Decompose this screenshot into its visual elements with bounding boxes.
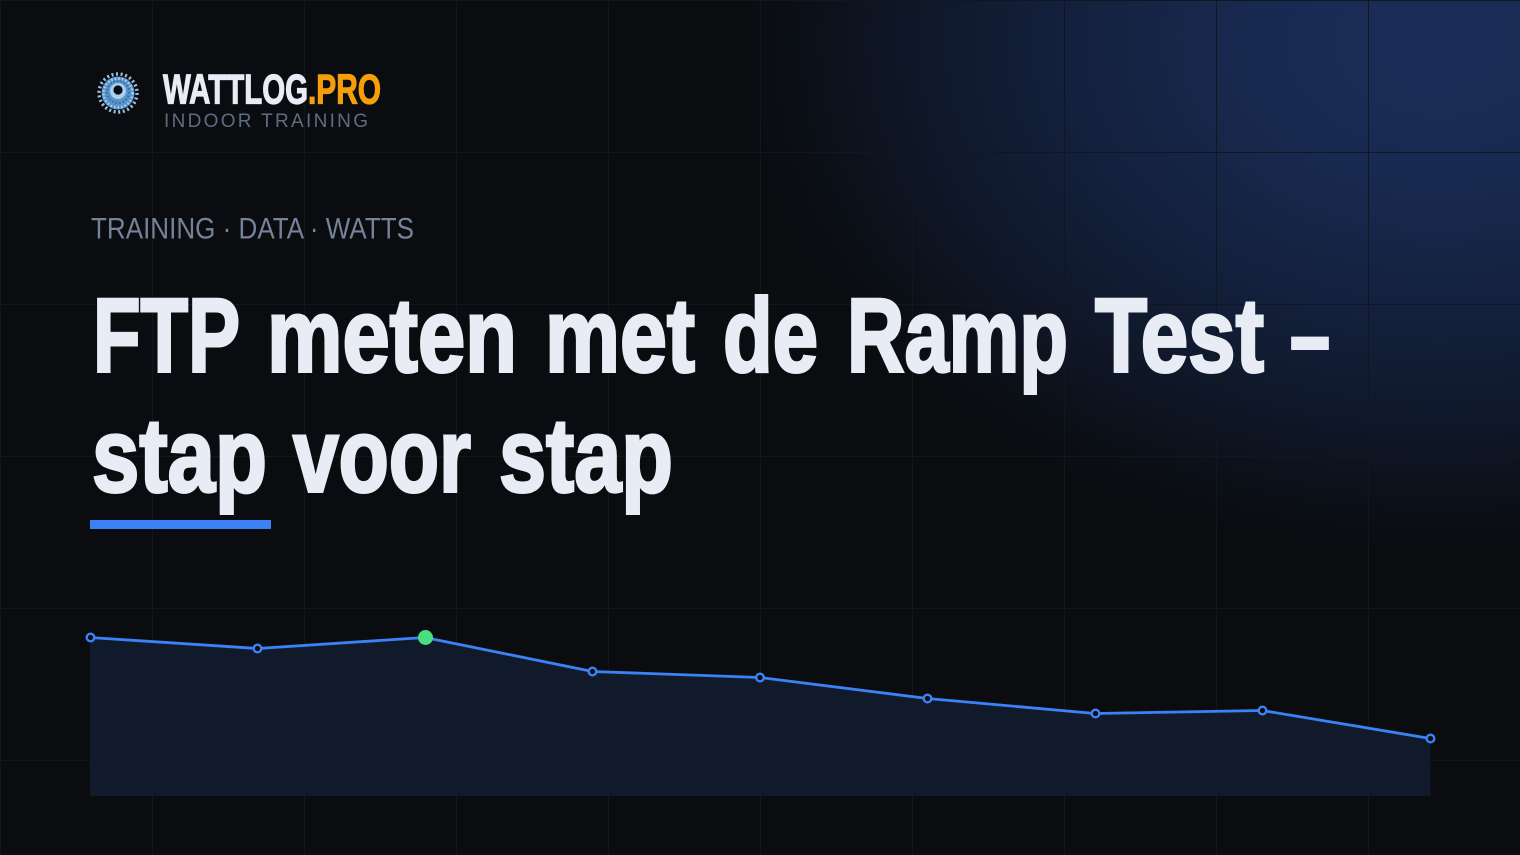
title: de bbox=[723, 278, 818, 394]
title: Test bbox=[1095, 278, 1264, 394]
title: FTP bbox=[93, 278, 240, 394]
title: voor bbox=[293, 398, 471, 514]
line chart bbox=[87, 630, 1434, 796]
chart peak point bbox=[418, 630, 433, 645]
title: Ramp bbox=[847, 278, 1068, 394]
brand name: .PRO bbox=[308, 66, 381, 112]
chart area fill bbox=[90, 637, 1430, 796]
title: stap bbox=[499, 398, 673, 514]
brand tagline: INDOOR TRAINING bbox=[164, 111, 368, 132]
title bbox=[92, 278, 1330, 514]
title: – bbox=[1290, 278, 1330, 394]
chart line bbox=[90, 638, 1430, 738]
icon: cassette gear logo bbox=[99, 74, 137, 112]
title: meten bbox=[267, 278, 517, 394]
eyebrow: TRAINING · DATA · WATTS bbox=[91, 212, 414, 246]
chart data points bbox=[87, 634, 1434, 742]
title underline accent bbox=[90, 520, 271, 529]
brand name: WATTLOG bbox=[163, 66, 308, 112]
title: stap bbox=[92, 398, 267, 514]
title: met bbox=[545, 278, 695, 394]
